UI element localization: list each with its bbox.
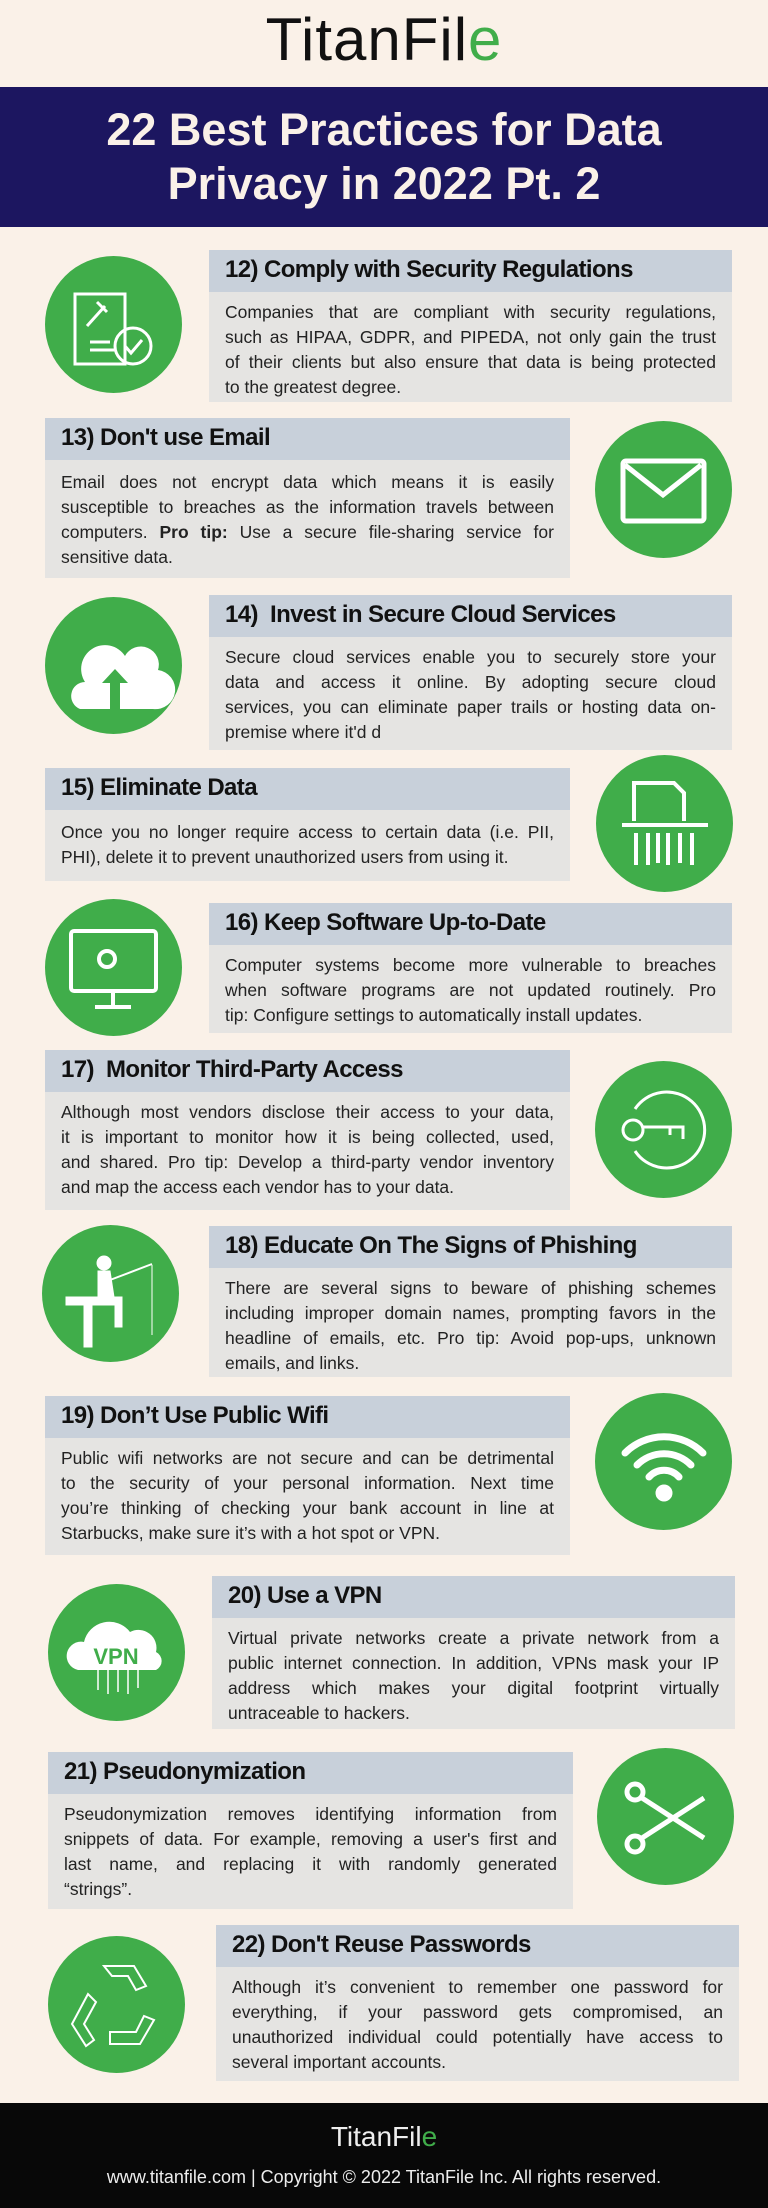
panel: 22: unauthorized individual could potentially have access to [232,2027,723,2047]
panel: 12: such as HIPAA, GDPR, and PIPEDA, not only gain the trust [225,327,716,347]
panel: 18: emails, and links. [225,1353,359,1373]
panel: 17: and map the access each vendor has to your data. [61,1177,454,1197]
panel: 19: you’re thinking of checking your bank account in line at [61,1498,554,1518]
panel: 22: 22) Don't Reuse Passwords [232,1931,531,1958]
panel: 22: several important accounts. [232,2052,446,2072]
title banner: Privacy in 2022 Pt. 2 [168,158,600,209]
panel: 13: sensitive data. [61,547,173,567]
panel: 21: snippets of data. For example, removing a user's first and [64,1829,557,1849]
icon: monitor [45,899,182,1036]
panel: 15 [45,768,570,881]
copyright: www.titanfile.com | Copyright © 2022 TitanFile Inc. All rights reserved. [107,2167,661,2187]
panel: 15: Once you no longer require access to certain data (i.e. PII, [61,822,554,842]
icon: vpn cloud: VPN [93,1644,139,1669]
panel: 16: Computer systems become more vulnerable to breaches [225,955,716,975]
panel: 19: to the security of your personal information. Next time [61,1473,554,1493]
panel: 13 [45,418,570,578]
icon: wifi [595,1393,732,1530]
panel: 17: 17) Monitor Third-Party Access [61,1056,403,1083]
panel: 19: 19) Don’t Use Public Wifi [61,1402,328,1429]
panel: 20: address which makes your digital footprint virtually [228,1678,719,1698]
icon: fisherman [42,1225,179,1362]
panel: 16: when software programs are not updated routinely. Pro [225,980,716,1000]
panel: 20: untraceable to hackers. [228,1703,410,1723]
icon: envelope [595,421,732,558]
panel: 18: There are several signs to beware of phishing schemes [225,1278,716,1298]
panel: 18: including improper domain names, prompting favors in the [225,1303,716,1323]
panel: 14: 14) Invest in Secure Cloud Services [225,601,616,628]
footer [0,2103,768,2208]
footer logo: TitanFile [331,2121,437,2152]
panel: 17: and shared. Pro tip: Develop a third-party vendor inventory [61,1152,554,1172]
panel: 14 [209,595,732,750]
panel: 19 [45,1396,570,1555]
panel: 12 [209,250,732,402]
panel: 12: of their clients but also ensure that data is being protected [225,352,716,372]
panel: 21 [48,1752,573,1909]
panel: 13: susceptible to breaches as the information travels between [61,497,554,517]
panel: 21: last name, and replacing it with randomly generated [64,1854,557,1874]
panel: 19: Starbucks, make sure it’s with a hot spot or VPN. [61,1523,440,1543]
logo: TitanFile [266,6,502,73]
panel: 21: “strings”. [64,1879,132,1899]
panel: 17 [45,1050,570,1210]
panel: 16: 16) Keep Software Up-to-Date [225,909,546,936]
panel: 18: headline of emails, etc. Pro tip: Avoid pop-ups, unknown [225,1328,716,1348]
icon: cloud upload [45,597,182,734]
panel: 20: 20) Use a VPN [228,1582,382,1609]
panel: 15: PHI), delete it to prevent unauthorized users from using it. [61,847,508,867]
panel: 21: Pseudonymization removes identifying information from [64,1804,557,1824]
panel: 16 [209,903,732,1033]
panel: 17: it is important to monitor how it is being collected, used, [61,1127,554,1147]
panel: 16: tip: Configure settings to automatically install updates. [225,1005,642,1025]
panel: 12: to the greatest degree. [225,377,401,397]
panel: 22: Although it’s convenient to remember one password for [232,1977,723,1997]
panel: 22 [216,1925,739,2081]
title banner [0,87,768,227]
panel: 13: 13) Don't use Email [61,424,270,451]
panel: 20 [212,1576,735,1729]
panel: 20: public internet connection. In addition, VPNs mask your IP [228,1653,719,1673]
panel: 14: data and access it online. By adopting secure cloud [225,672,716,692]
panel: 20: Virtual private networks create a private network from a [228,1628,719,1648]
panel: 21: 21) Pseudonymization [64,1758,305,1785]
icon: vpn cloud [48,1584,185,1721]
icon: key [595,1061,732,1198]
title banner: 22 Best Practices for Data [106,104,662,155]
panel: 19: Public wifi networks are not secure and can be detrimental [61,1448,554,1468]
panel: 14: premise where it'd d [225,722,381,742]
icon: document with gavel [45,256,182,393]
panel: 18 [209,1226,732,1377]
panel: 12: 12) Comply with Security Regulations [225,256,633,283]
panel: 22: everything, if your password gets compromised, an [232,2002,723,2022]
panel: 14: services, you can eliminate paper trails or hosting data on- [225,697,716,717]
panel: 14: Secure cloud services enable you to securely store your [225,647,716,667]
icon: scissors [597,1748,734,1885]
panel: 12: Companies that are compliant with security regulations, [225,302,716,322]
panel: 13: Email does not encrypt data which means it is easily [61,472,554,492]
panel: 17: Although most vendors disclose their access to your data, [61,1102,554,1122]
icon: shredder [596,755,733,892]
panel: 13: computers. Pro tip: Use a secure file-sharing service for [61,522,554,542]
icon: recycle [48,1936,185,2073]
panel: 15: 15) Eliminate Data [61,774,257,801]
panel: 18: 18) Educate On The Signs of Phishing [225,1232,637,1259]
